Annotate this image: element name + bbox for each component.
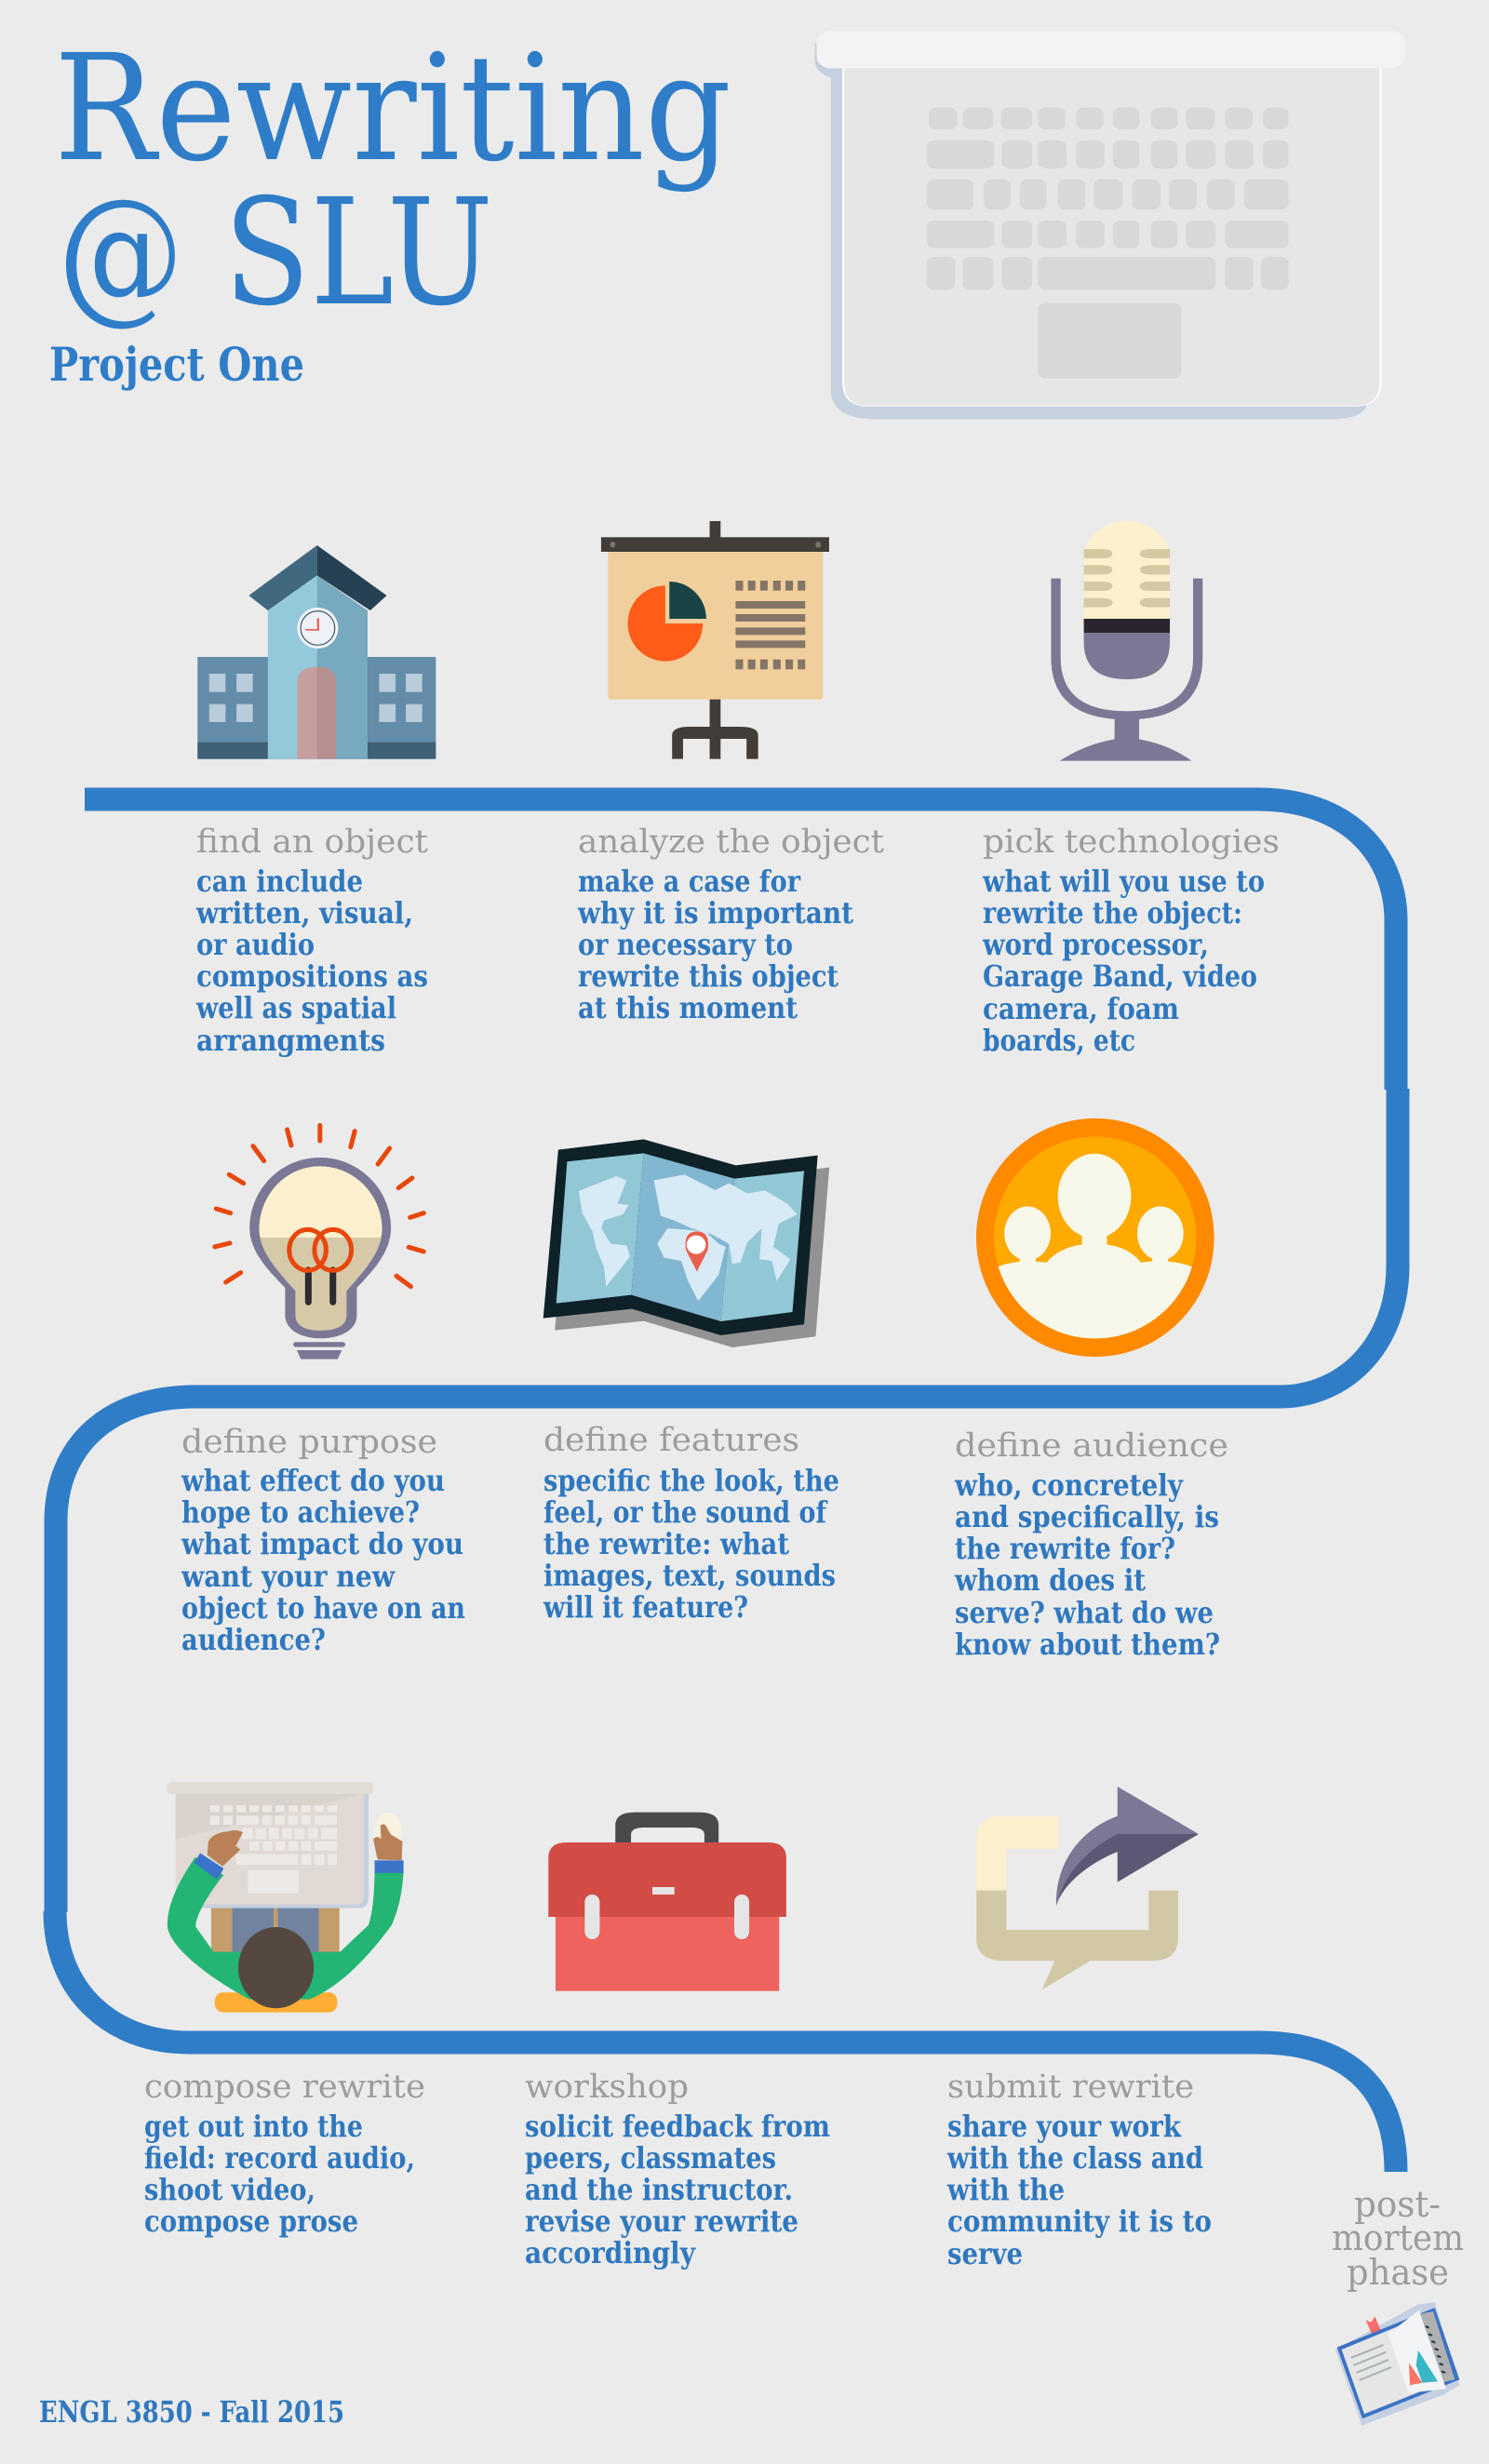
panel: define features [543,1139,839,1625]
description [543,1463,839,1625]
description: feel, or the sound of [543,1494,828,1530]
title line 2: @ SLU [58,167,493,339]
description: whom does it [954,1562,1146,1598]
description: images, text, sounds [543,1558,836,1593]
description [982,864,1265,1058]
description: well as spatial [195,990,396,1025]
heading: define features [543,1422,799,1459]
icon: person at laptop [167,1782,404,2013]
description [195,864,428,1058]
panel: submit rewrite [946,1787,1212,2271]
description: solicit feedback from [525,2109,830,2144]
description: compositions as [196,958,428,994]
description: with the [946,2172,1065,2207]
description: want your new [181,1559,396,1594]
description: field: record audio, [144,2140,415,2176]
description: boards, etc [983,1023,1135,1058]
panel: define audience [954,1118,1228,1662]
heading: workshop [525,2069,689,2106]
icon: light bulb [215,1125,423,1359]
description: or audio [196,927,315,962]
panel: workshop [525,1813,830,2270]
panel: post-mortem phase [1332,2184,1464,2426]
description: community it is to [947,2203,1212,2239]
description: shoot video, [144,2172,315,2207]
footer: ENGL 3850 - Fall 2015 [39,2394,344,2430]
heading: define purpose [181,1424,437,1461]
description: object to have on an [181,1590,465,1626]
heading: pick technologies [983,824,1280,861]
description: at this moment [578,990,798,1025]
title block [49,23,731,392]
heading [1332,2184,1464,2293]
heading: compose rewrite [144,2069,425,2106]
description [954,1467,1220,1662]
description: accordingly [525,2235,696,2270]
description: what impact do you [181,1526,463,1561]
icon: audience group [976,1118,1214,1357]
description [144,2109,415,2239]
description: the rewrite for? [955,1531,1175,1566]
description: make a case for [578,864,801,899]
title line 1: Rewriting [54,23,731,194]
panel: analyze the object [577,521,884,1025]
description [577,864,853,1025]
description [525,2109,830,2270]
description: word processor, [982,927,1209,962]
description: written, visual, [195,895,413,931]
heading: define audience [955,1427,1228,1465]
description: serve? what do we [955,1595,1214,1630]
description: Garage Band, video [983,958,1257,994]
description [181,1463,465,1657]
description: the rewrite: what [543,1526,789,1561]
heading: submit rewrite [947,2069,1194,2106]
icon: map [543,1139,829,1347]
description: rewrite the object: [983,895,1242,931]
icon: open book [1335,2302,1459,2426]
description: arrangments [196,1023,385,1058]
icon: building [197,545,436,759]
description: why it is important [577,895,853,931]
heading: post- [1354,2184,1441,2225]
description: with the class and [946,2140,1203,2176]
description: and specifically, is [955,1499,1219,1534]
description: rewrite this object [578,958,838,994]
description: what will you use to [982,864,1265,899]
icon: laptop [815,31,1405,420]
description [946,2109,1212,2271]
description: who, concretely [954,1467,1184,1503]
heading: phase [1347,2252,1449,2293]
icon: microphone [1051,521,1202,761]
description: will it feature? [543,1589,748,1625]
description: audience? [181,1622,326,1657]
heading: find an object [196,824,428,861]
panel: compose rewrite [144,1782,425,2239]
description: hope to achieve? [181,1494,420,1530]
description: serve [947,2236,1023,2271]
description: what effect do you [181,1463,445,1498]
description: or necessary to [578,927,793,962]
heading: mortem [1332,2217,1464,2258]
description: share your work [947,2109,1182,2144]
subtitle: Project One [49,337,304,392]
description: revise your rewrite [525,2203,798,2239]
panel: find an object [195,545,436,1058]
icon: share arrow [976,1787,1199,1989]
description: compose prose [144,2203,358,2239]
panel: define purpose [181,1125,465,1657]
description: get out into the [144,2109,363,2144]
description: can include [196,864,363,899]
panel: pick technologies [982,521,1280,1058]
description: camera, foam [983,991,1179,1026]
description: and the instructor. [525,2172,793,2207]
icon: presentation board [601,521,829,759]
icon: briefcase [548,1813,786,1991]
description: know about them? [955,1627,1220,1662]
heading: analyze the object [578,824,884,861]
description: peers, classmates [525,2140,776,2176]
description: specific the look, the [543,1463,839,1498]
process path line [55,799,1398,2172]
